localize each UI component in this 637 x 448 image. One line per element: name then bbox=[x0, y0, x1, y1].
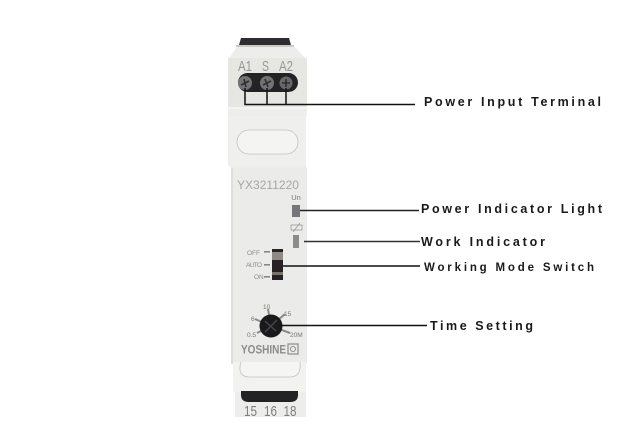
time dial bbox=[247, 304, 303, 339]
mode labels: AUTO bbox=[246, 262, 262, 269]
mode labels: OFF bbox=[247, 250, 260, 257]
top terminals bbox=[238, 73, 298, 92]
time dial: 10 bbox=[263, 304, 271, 311]
bottom terminals bbox=[241, 391, 298, 402]
callout: work indicator: Work Indicator bbox=[421, 235, 545, 249]
terminal labels bottom: 15 bbox=[244, 403, 257, 420]
terminal labels top: S bbox=[262, 58, 269, 75]
terminal labels top bbox=[238, 58, 293, 75]
terminal labels bottom: 16 bbox=[264, 403, 277, 420]
relay device bbox=[228, 38, 307, 420]
callout: power input terminal bbox=[245, 88, 601, 109]
time dial: 20M bbox=[290, 332, 303, 339]
work LED bbox=[293, 235, 299, 248]
callout: working mode switch: Working Mode Switch bbox=[424, 262, 594, 274]
callout: power input terminal: Power Input Terminal bbox=[424, 95, 601, 109]
power LED bbox=[292, 205, 300, 217]
terminal labels top: A1 bbox=[238, 58, 252, 75]
callout: power indicator light: Power Indicator Light bbox=[421, 202, 603, 216]
time dial: 0.5 bbox=[247, 332, 256, 339]
mode switch bbox=[272, 249, 283, 280]
relay symbol bbox=[291, 223, 302, 232]
Un label: Un bbox=[291, 193, 301, 202]
terminal labels top: A2 bbox=[279, 58, 293, 75]
oval window top bbox=[237, 130, 298, 154]
top clip bbox=[239, 38, 291, 45]
time dial: 15 bbox=[284, 311, 292, 318]
oval window bottom bbox=[240, 362, 300, 377]
mode labels bbox=[246, 250, 270, 281]
device body bbox=[228, 47, 307, 417]
time dial: 6 bbox=[251, 316, 255, 323]
model number: YX3211220 bbox=[237, 180, 299, 192]
brand logo: YOSHINE bbox=[241, 344, 286, 356]
terminal labels bottom: 18 bbox=[284, 403, 296, 420]
terminal labels bottom bbox=[244, 403, 296, 420]
mode labels: ON bbox=[254, 274, 264, 281]
callout: time setting: Time Setting bbox=[430, 319, 533, 333]
